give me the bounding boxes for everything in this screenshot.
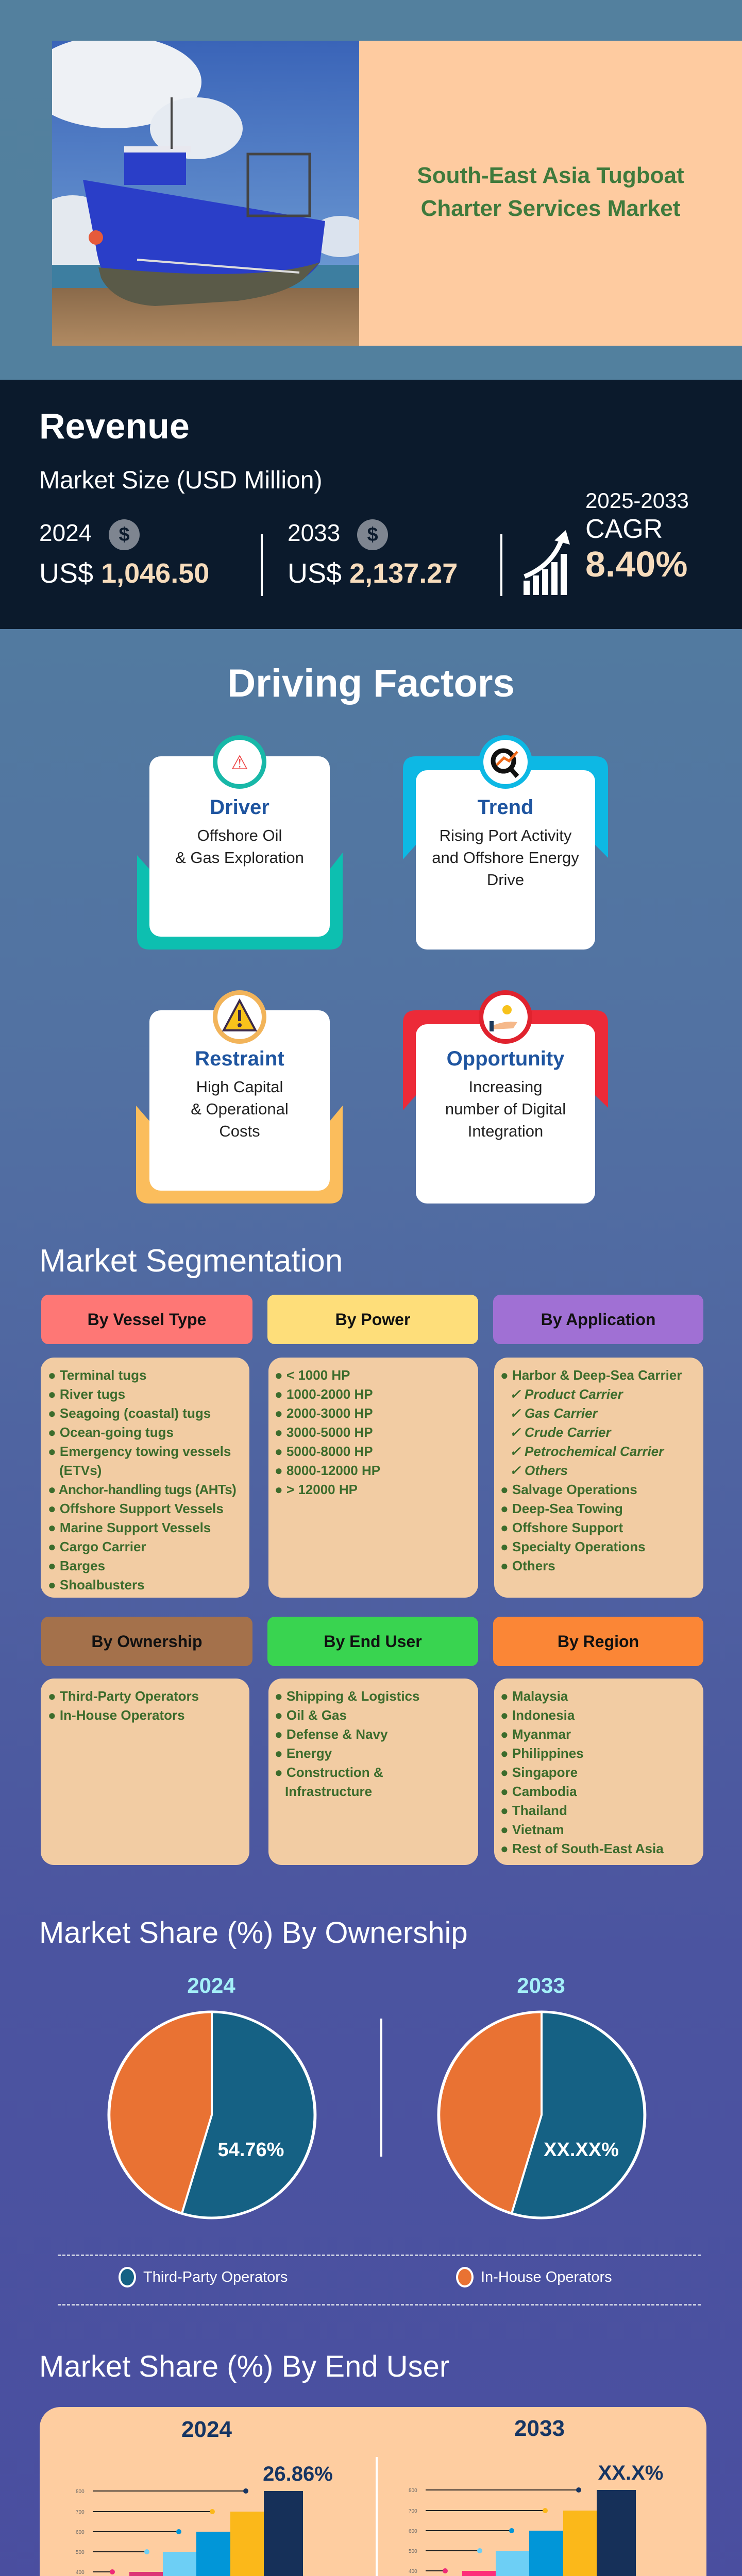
segment list: ownership: ● Third-Party Operators [48, 1688, 199, 1704]
segment list: region: ● Philippines [500, 1745, 584, 1761]
legend: ownership: Third-Party Operators [143, 2269, 288, 2285]
segment list: end user: ● Shipping & Logistics [275, 1688, 419, 1704]
bar chart panel: 26.86% [263, 2463, 333, 2485]
card: opportunity [403, 990, 608, 1204]
segment list: power: ● 1000-2000 HP [275, 1386, 373, 1402]
segment list: end user: ● Energy [275, 1745, 332, 1761]
segment list: vessel type: ● Cargo Carrier [48, 1539, 146, 1554]
bar chart panel: 500 [76, 2550, 85, 2555]
segment list: end user: ● Oil & Gas [275, 1707, 347, 1723]
pie chart: 2024 ownership: 2024 [187, 1973, 235, 1997]
2033 value: 2033 [288, 519, 340, 546]
divider [261, 534, 263, 596]
title text [417, 163, 684, 221]
2024 value [39, 519, 209, 589]
2024 value: US$ 1,046.50 [39, 558, 209, 589]
card: opportunity: Increasing [468, 1078, 543, 1096]
card: restraint: High Capital [196, 1078, 283, 1096]
card: restraint: Costs [219, 1122, 260, 1140]
segment list: end user: Infrastructure [285, 1784, 372, 1799]
segment list: application: ● Salvage Operations [500, 1482, 637, 1497]
segment list: vessel type: ● Marine Support Vessels [48, 1520, 211, 1535]
card: trend: and Offshore Energy [432, 849, 579, 867]
title text: South-East Asia Tugboat [417, 163, 684, 188]
segment header: application: By Application [541, 1310, 655, 1328]
2024 value: 2024 [39, 519, 92, 546]
segment list: application: ● Others [500, 1558, 555, 1573]
card: opportunity: Opportunity [447, 1047, 564, 1070]
segment list: vessel type: ● Offshore Support Vessels [48, 1501, 224, 1516]
card: driver: ⚠ [231, 752, 248, 774]
segment list: vessel type: ● Terminal tugs [48, 1367, 146, 1383]
2033 value: $ [367, 524, 378, 546]
legend: ownership: In-House Operators [481, 2269, 612, 2285]
segment list: region: ● Rest of South-East Asia [500, 1841, 664, 1856]
pie chart: 2024 ownership: 54.76% [218, 2139, 284, 2161]
segment list: vessel type: ● Anchor-handling tugs (AHTs) [48, 1482, 236, 1497]
pie chart: 2033 ownership: XX.XX% [544, 2139, 619, 2161]
segment header: vessel type [41, 1295, 252, 1344]
heading: market share by end user: Market Share (%) By End User [39, 2350, 449, 2383]
segment header: power [267, 1295, 478, 1344]
card: opportunity: number of Digital [445, 1100, 566, 1118]
revenue heading: Revenue [39, 406, 190, 446]
card: restraint: & Operational [191, 1100, 289, 1118]
card: trend: Drive [487, 871, 524, 889]
segment list: region: ● Vietnam [500, 1822, 564, 1837]
segment list: application: ✓ Others [510, 1463, 568, 1478]
bar chart panel: 600 [76, 2530, 85, 2535]
segment list: power: ● 5000-8000 HP [275, 1444, 373, 1459]
segment list: vessel type [41, 1358, 249, 1598]
segment header: vessel type: By Vessel Type [88, 1310, 206, 1328]
segment list: application: ✓ Gas Carrier [510, 1405, 598, 1421]
segment list: end user [268, 1679, 478, 1865]
bar chart panel: XX.X% [598, 2462, 663, 2484]
segment header: ownership [41, 1617, 252, 1666]
heading: market share by ownership: Market Share (%) By Ownership [39, 1916, 468, 1950]
segment list: power [268, 1358, 478, 1598]
divider [380, 2019, 382, 2157]
bar chart panel: 700 [76, 2510, 85, 2515]
segment list: power: ● 2000-3000 HP [275, 1405, 373, 1421]
bar chart panel: 700 [409, 2509, 417, 2514]
heading: driving factors: Driving Factors [227, 662, 515, 705]
segment list: ownership: ● In-House Operators [48, 1707, 185, 1723]
segment header: ownership: By Ownership [91, 1632, 203, 1651]
card: restraint: Restraint [195, 1047, 284, 1070]
segment list: application [494, 1358, 703, 1598]
segment list: power: ● > 12000 HP [275, 1482, 358, 1497]
icon: growth chart [524, 530, 570, 595]
bar chart panel: 800 [76, 2489, 85, 2495]
market size subtitle: Market Size (USD Million) [39, 467, 322, 494]
heading: market segmentation: Market Segmentation [39, 1243, 343, 1279]
title panel [359, 41, 742, 346]
card: driver [137, 735, 343, 950]
bar chart panel: 2033 [514, 2416, 565, 2441]
bar chart panel: 500 [409, 2549, 417, 2554]
segment header: region [493, 1617, 703, 1666]
card: driver: & Gas Exploration [175, 849, 304, 867]
segment header: application [493, 1295, 703, 1344]
segment list: application: ● Specialty Operations [500, 1539, 646, 1554]
segment list: region [494, 1679, 703, 1865]
segment list: vessel type: ● Emergency towing vessels [48, 1444, 231, 1459]
segment header: end user [267, 1617, 478, 1666]
header image: boat on beach [52, 41, 359, 346]
card: trend [403, 735, 608, 950]
CAGR: CAGR [585, 514, 663, 544]
pie chart: 2024 ownership [107, 1973, 316, 2219]
segment list: vessel type: ● Barges [48, 1558, 105, 1573]
segment list: application: ● Harbor & Deep-Sea Carrier [500, 1367, 682, 1383]
title text: Charter Services Market [421, 196, 680, 221]
segment list: region: ● Myanmar [500, 1726, 571, 1742]
card: trend: Rising Port Activity [440, 826, 571, 844]
card: restraint [136, 990, 343, 1204]
bar chart panel: 400 [409, 2569, 417, 2574]
segment list: region: ● Cambodia [500, 1784, 577, 1799]
bar chart panel: 800 [409, 2488, 417, 2494]
segment list: region: ● Singapore [500, 1765, 578, 1780]
segment list: vessel type: ● River tugs [48, 1386, 125, 1402]
segment list: power: ● 3000-5000 HP [275, 1425, 373, 1440]
2024 value: $ [119, 524, 130, 546]
bar chart panel [40, 2407, 706, 2576]
card: opportunity: Integration [468, 1122, 543, 1140]
card: driver: Driver [210, 796, 269, 819]
CAGR: 8.40% [585, 544, 687, 584]
segment list: vessel type: (ETVs) [59, 1463, 102, 1478]
segment header: power: By Power [335, 1310, 410, 1328]
segment list: vessel type: ● Seagoing (coastal) tugs [48, 1405, 211, 1421]
segment list: application: ● Deep-Sea Towing [500, 1501, 623, 1516]
CAGR: 2025-2033 [585, 488, 689, 513]
card: trend: Trend [478, 796, 533, 819]
segment list: application: ● Offshore Support [500, 1520, 623, 1535]
2033 value: US$ 2,137.27 [288, 558, 458, 589]
segment list: end user: ● Defense & Navy [275, 1726, 387, 1742]
segment header: end user: By End User [324, 1632, 422, 1651]
segment list: power: ● 8000-12000 HP [275, 1463, 380, 1478]
segment list: region: ● Indonesia [500, 1707, 575, 1723]
pie chart: 2033 ownership [437, 1973, 646, 2219]
bar chart panel: 2024 [181, 2417, 232, 2442]
segment list: ownership [41, 1679, 249, 1865]
segment list: region: ● Malaysia [500, 1688, 568, 1704]
2033 value [288, 519, 458, 589]
bar chart panel: 400 [76, 2570, 85, 2575]
CAGR [585, 488, 689, 584]
revenue band [0, 380, 742, 629]
segment list: region: ● Thailand [500, 1803, 567, 1818]
legend: ownership [119, 2267, 612, 2287]
segment list: vessel type: ● Shoalbusters [48, 1577, 145, 1592]
card: driver: Offshore Oil [197, 826, 282, 844]
bar chart panel: 600 [409, 2529, 417, 2534]
segment list: application: ✓ Crude Carrier [510, 1425, 611, 1440]
segment header: region: By Region [558, 1632, 639, 1651]
segment list: application: ✓ Product Carrier [510, 1386, 623, 1402]
segment list: application: ✓ Petrochemical Carrier [510, 1444, 664, 1459]
segment list: vessel type: ● Ocean-going tugs [48, 1425, 174, 1440]
segment list: end user: ● Construction & [275, 1765, 383, 1780]
pie chart: 2033 ownership: 2033 [517, 1973, 565, 1997]
segment list: power: ● < 1000 HP [275, 1367, 350, 1383]
